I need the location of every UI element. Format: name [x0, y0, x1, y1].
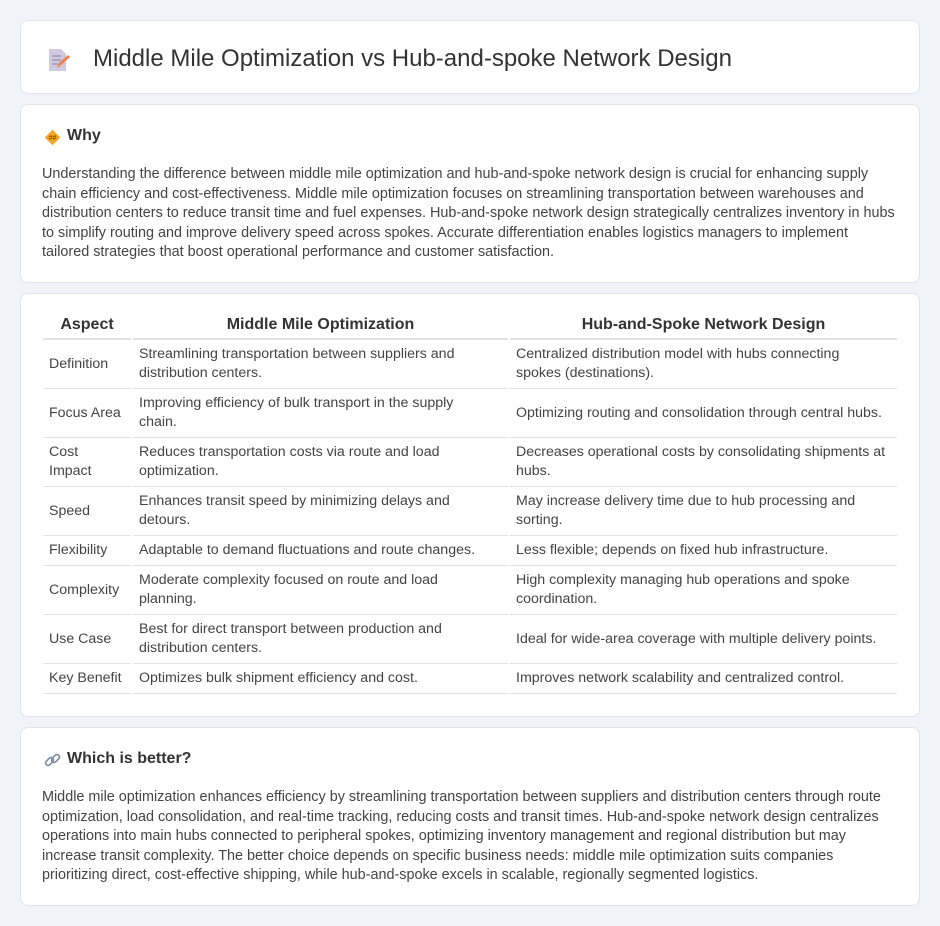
comparison table: detours. — [139, 512, 190, 528]
comparison table: Impact — [49, 463, 92, 479]
comparison table: Improving efficiency of bulk transport in the supply — [139, 395, 453, 411]
text: why paragraph: Understanding the difference between middle mile optimization and hub-and-spoke network design is crucial for enhancing supply — [42, 166, 868, 182]
comparison table: May increase delivery time due to hub processing and — [516, 493, 855, 509]
comparison table: distribution centers. — [139, 640, 262, 656]
heading: which is better: Which is better? — [67, 750, 191, 767]
comparison table: Aspect — [60, 316, 114, 333]
comparison table: Decreases operational costs by consolidating shipments at — [516, 444, 885, 460]
comparison table: Hub-and-Spoke Network Design — [582, 316, 825, 333]
text: which is better paragraph: Middle mile optimization enhances efficiency by streamlining transportation between suppliers and distribution centers through route — [42, 789, 881, 805]
comparison table — [43, 316, 897, 694]
text: why paragraph: distribution centers to reduce transit time and fuel expenses. Hub-and-spoke network design strategically centralizes inventory in hubs — [42, 205, 895, 221]
comparison table: Best for direct transport between production and — [139, 621, 442, 637]
comparison table: Use Case — [49, 630, 111, 646]
text: why paragraph: chain efficiency and cost-effectiveness. Middle mile optimization focuses on streamlining transportation between warehouses and — [42, 186, 864, 202]
comparison table: optimization. — [139, 463, 219, 479]
comparison table: Moderate complexity focused on route and load — [139, 572, 438, 588]
panel: why — [20, 104, 920, 283]
text: which is better paragraph — [42, 789, 881, 883]
icon: diamond sign: ## — [49, 135, 56, 142]
icon: document with pencil — [49, 49, 70, 71]
text: why paragraph: to simplify routing and improve delivery speed across spokes. Accurate differentiation enables logistics managers to implement — [42, 225, 848, 241]
text: which is better paragraph: optimization, load consolidation, and real-time tracking, reducing costs and transit times. Hub-and-spoke network design centralizes — [42, 809, 879, 825]
comparison table: spokes (destinations). — [516, 365, 654, 381]
text: which is better paragraph: prioritizing direct, cost-effective shipping, while hub-and-spoke excels in scalable, regionally segmented logistics. — [42, 867, 758, 883]
comparison table: Centralized distribution model with hubs connecting — [516, 346, 839, 362]
text: which is better paragraph: operations into main hubs connected to peripheral spokes, optimizing inventory management and regional distribution but may — [42, 828, 846, 844]
comparison table: chain. — [139, 414, 177, 430]
comparison table: Ideal for wide-area coverage with multiple delivery points. — [516, 630, 876, 646]
panel: comparison table — [20, 293, 920, 717]
icon: link — [44, 754, 60, 766]
comparison table: planning. — [139, 591, 197, 607]
comparison table: Less flexible; depends on fixed hub infrastructure. — [516, 542, 828, 558]
comparison table: hubs. — [516, 463, 551, 479]
comparison table: distribution centers. — [139, 365, 262, 381]
comparison table: Flexibility — [49, 542, 107, 558]
comparison table: Speed — [49, 502, 90, 518]
header card — [20, 20, 920, 94]
comparison table: Middle Mile Optimization — [227, 316, 414, 333]
comparison table: Improves network scalability and centralized control. — [516, 670, 844, 686]
heading: why: Why — [67, 127, 101, 144]
panel: which is better — [20, 727, 920, 906]
text: why paragraph: tailored strategies that boost operational performance and customer satisfaction. — [42, 244, 554, 260]
comparison table: High complexity managing hub operations and spoke — [516, 572, 850, 588]
comparison table: coordination. — [516, 591, 597, 607]
text: which is better paragraph: increase transit complexity. The better choice depends on specific business needs: middle mile optimization suits companies — [42, 848, 833, 864]
comparison table: Complexity — [49, 582, 119, 598]
comparison table: Streamlining transportation between suppliers and — [139, 346, 454, 362]
icon: diamond sign — [44, 130, 60, 146]
comparison table: Optimizes bulk shipment efficiency and cost. — [139, 670, 418, 686]
comparison table: Cost — [49, 444, 78, 460]
comparison table: Definition — [49, 356, 108, 372]
comparison table: Key Benefit — [49, 670, 122, 686]
comparison table: Enhances transit speed by minimizing delays and — [139, 493, 450, 509]
comparison table: Focus Area — [49, 404, 121, 420]
comparison table: sorting. — [516, 512, 563, 528]
comparison table: Optimizing routing and consolidation through central hubs. — [516, 404, 882, 420]
text: why paragraph — [42, 166, 895, 260]
comparison table: Reduces transportation costs via route and load — [139, 444, 439, 460]
comparison table: Adaptable to demand fluctuations and route changes. — [139, 542, 475, 558]
title: Middle Mile Optimization vs Hub-and-spoke Network Design — [93, 45, 732, 72]
